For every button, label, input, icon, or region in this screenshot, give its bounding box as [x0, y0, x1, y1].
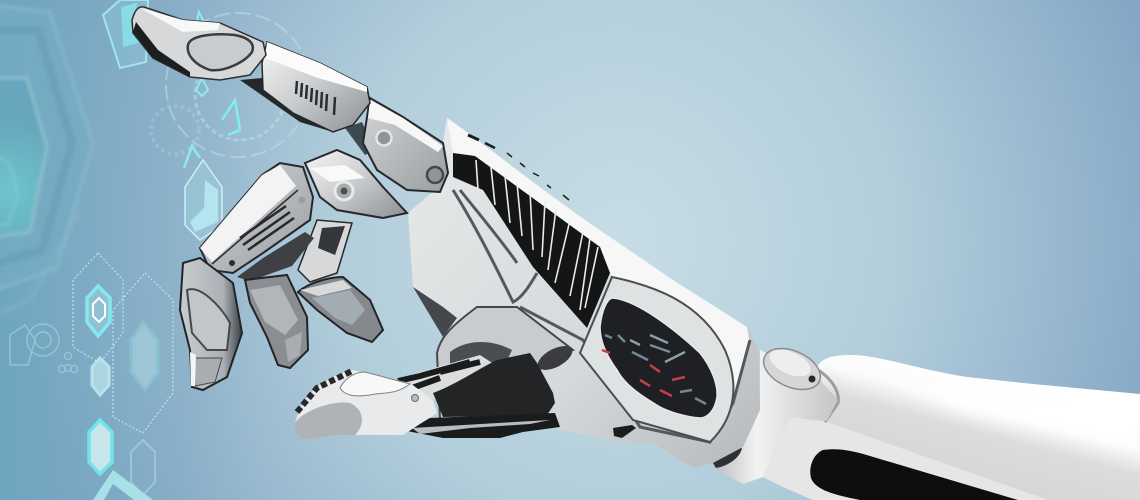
faint hexagon icon bottom — [131, 440, 155, 495]
palm bottom vent — [613, 425, 636, 438]
thumb black joint — [433, 353, 555, 417]
top white band — [447, 118, 750, 400]
bottom triangle — [93, 470, 153, 500]
large hexagon tunnel — [0, 5, 93, 315]
thumb cables — [395, 355, 500, 400]
middle finger — [180, 150, 407, 390]
top edge dashes — [468, 135, 569, 200]
index fingertip — [132, 7, 266, 80]
window surround — [580, 277, 733, 442]
palm lower dark edge — [413, 287, 457, 337]
middle tip — [180, 258, 242, 390]
thumb underside — [407, 413, 560, 438]
forearm cuff — [763, 417, 1048, 500]
small hexagon icon — [92, 358, 109, 395]
middle mid segment — [200, 163, 313, 273]
thumb tip — [295, 370, 437, 440]
hexagon circuit cluster — [10, 324, 78, 372]
upper circuit rings — [151, 13, 310, 157]
dotted hexagon nodes — [73, 253, 173, 433]
thumb — [295, 307, 576, 440]
top cyan hexagon cluster — [103, 0, 240, 135]
grey palm contour lines — [453, 190, 750, 442]
glowing hexagon icon lower — [89, 420, 112, 474]
forearm — [763, 355, 1140, 500]
holographic interface panel — [0, 0, 340, 500]
wrist slot — [713, 448, 742, 468]
wrist joint — [713, 340, 838, 484]
middle base segment — [305, 150, 407, 218]
forearm seam — [815, 368, 838, 422]
thumb socket ring — [437, 307, 573, 420]
glowing hexagon icon upper — [87, 286, 110, 336]
ring finger — [237, 232, 314, 368]
panel stripes — [476, 160, 598, 310]
hexagon by middle finger — [184, 146, 222, 240]
knuckle — [363, 98, 448, 192]
pinky finger — [298, 220, 383, 342]
index tendons — [240, 78, 333, 132]
forearm black strip — [810, 449, 1018, 500]
index mid segment — [262, 42, 370, 132]
index finger — [132, 7, 448, 192]
left teal wash — [0, 0, 340, 500]
black side panel — [453, 153, 610, 328]
chest oval window — [600, 298, 717, 418]
forearm right highlight — [900, 385, 1140, 448]
thumb knob — [534, 341, 576, 375]
palm — [408, 118, 760, 468]
faint hexagon icon middle — [131, 322, 158, 390]
wrist dial — [757, 340, 827, 398]
